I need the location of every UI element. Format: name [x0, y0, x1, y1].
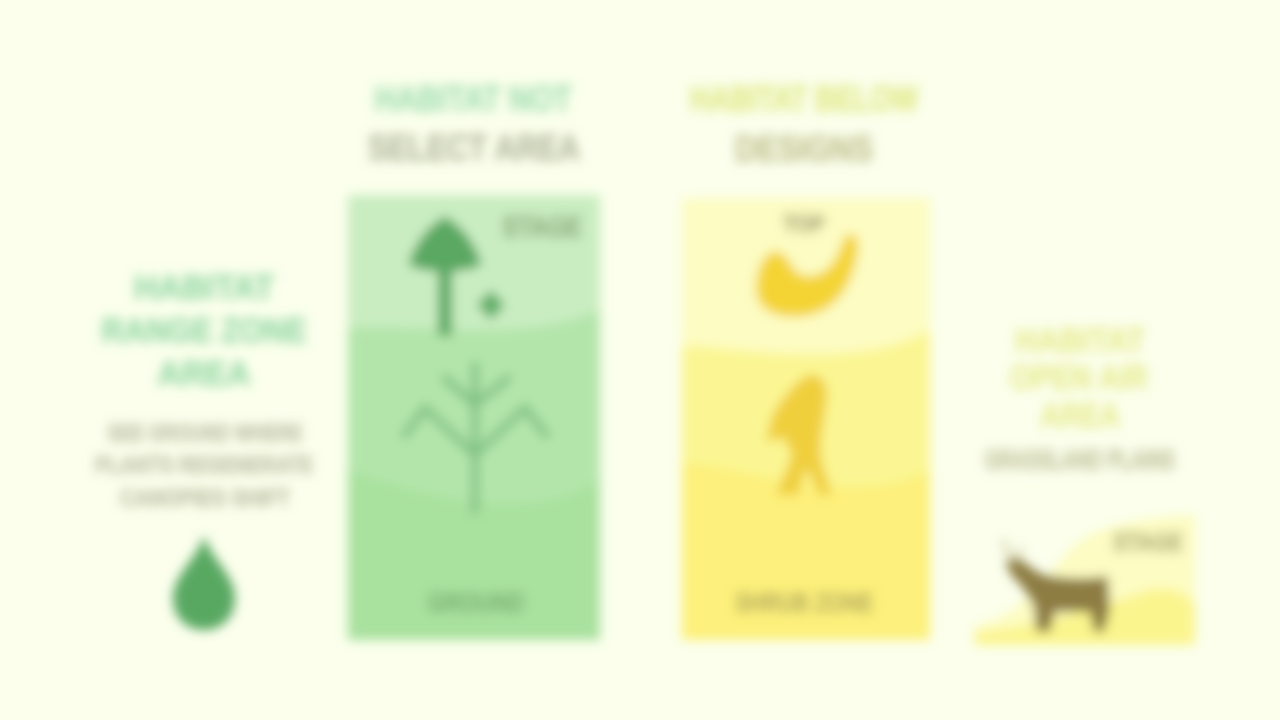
text block: forest floor description: PLANTS REGENERATE — [95, 452, 313, 479]
heading: yellow habitat: DESIGNS — [735, 128, 873, 169]
label: ground stage: STAGE — [1113, 527, 1183, 557]
icon: branching sapling — [405, 365, 546, 510]
heading: ground habitat: OPEN AIR — [1010, 359, 1148, 397]
heading: forest floor — [102, 269, 306, 393]
panel: ground hill — [975, 515, 1195, 645]
column: green habitat — [348, 78, 600, 640]
panel: green habitat layers — [348, 195, 600, 640]
text block: forest floor description — [95, 420, 313, 512]
heading: yellow habitat — [690, 78, 918, 169]
icon: walking figure — [766, 374, 832, 495]
heading: green habitat: HABITAT NOT — [374, 78, 572, 119]
label: top stage: TOP — [783, 211, 825, 238]
label: top stage: STAGE — [502, 211, 582, 244]
heading: ground habitat: HABITAT — [1015, 322, 1145, 360]
heading: forest floor: AREA — [158, 355, 250, 393]
heading: green habitat — [368, 78, 580, 168]
heading: ground habitat: AREA — [1040, 397, 1120, 435]
column: forest floor — [95, 269, 313, 630]
text block: ground habitat description: GRASSLAND PLAINS — [985, 444, 1175, 475]
text block: forest floor description: CANOPIES SHIFT — [120, 485, 290, 512]
icon: tall tree — [408, 216, 482, 336]
icon: water drop — [173, 535, 235, 630]
label: bottom stage: SHRUB ZONE — [735, 587, 873, 618]
heading: ground habitat — [1010, 322, 1148, 435]
column: yellow habitat — [682, 78, 930, 640]
panel: yellow habitat layers — [682, 198, 930, 640]
heading: forest floor: HABITAT — [134, 269, 274, 307]
text block: forest floor description: SEE GROUND WHERE — [108, 420, 302, 447]
icon: small shrub — [477, 290, 505, 320]
label: bottom stage: GROUND — [428, 587, 524, 618]
icon: yellow creature — [756, 234, 858, 317]
heading: forest floor: RANGE ZONE — [102, 312, 306, 350]
column: ground habitat — [975, 322, 1195, 645]
icon: deer — [1003, 540, 1110, 632]
heading: green habitat: SELECT AREA — [368, 127, 580, 168]
heading: yellow habitat: HABITAT BELOW — [690, 78, 918, 119]
